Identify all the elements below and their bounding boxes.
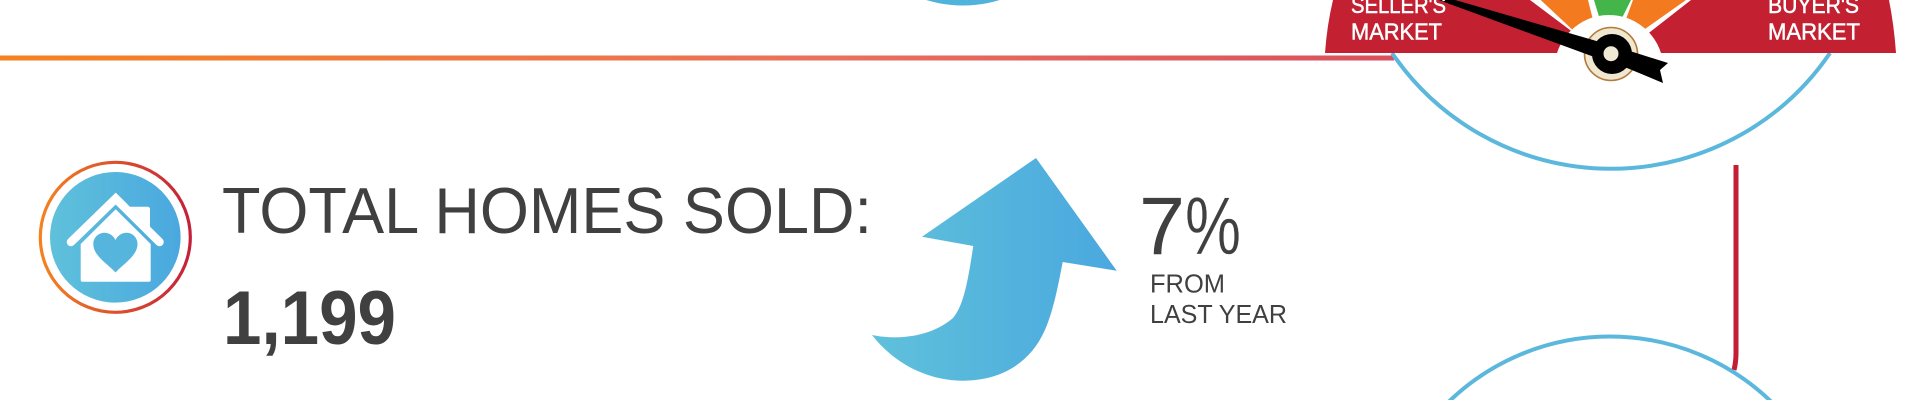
market gauge	[1325, 0, 1896, 124]
heading: total homes sold: TOTAL HOMES SOLD:	[222, 174, 872, 247]
arrow: upward trend	[872, 158, 1117, 381]
gauge needle	[1376, 0, 1668, 83]
gauge red band	[1325, 0, 1896, 53]
label: seller's market	[1351, 0, 1446, 44]
gauge left orange segment	[1541, 0, 1593, 35]
gauge white hub area	[1554, 15, 1664, 124]
upper blue circle outline	[1392, 53, 1830, 169]
value: 1,199: 1,199	[223, 276, 396, 361]
caption: from last year: FROM	[1150, 268, 1225, 298]
stat: 7 percent: 7	[1139, 181, 1185, 272]
icon heart	[93, 233, 138, 272]
red vertical connector	[1734, 165, 1736, 370]
icon outer ring	[40, 162, 190, 312]
gradient divider line	[0, 56, 1394, 60]
stat: 7 percent: %	[1185, 181, 1241, 272]
stat: 7 percent	[1139, 181, 1241, 272]
icon house body	[81, 209, 151, 282]
gauge green segment	[1594, 0, 1631, 20]
lower blue circle outline	[1449, 337, 1771, 400]
gauge needle hub	[1592, 34, 1632, 74]
icon: house with heart	[40, 162, 190, 312]
blue circle cap at top	[838, 0, 1088, 6]
label: buyer's market	[1768, 0, 1860, 44]
caption: from last year: LAST YEAR	[1150, 299, 1287, 329]
caption: from last year	[1150, 268, 1287, 329]
gauge hub ring	[1584, 28, 1638, 80]
gauge right orange segment	[1622, 0, 1686, 30]
icon blue disc	[50, 172, 181, 303]
gauge white fan behind segments	[1530, 0, 1691, 60]
label: buyer's market: MARKET	[1768, 18, 1860, 44]
label: seller's market: MARKET	[1351, 18, 1442, 44]
icon roof	[71, 199, 160, 242]
icon chimney	[129, 207, 150, 228]
